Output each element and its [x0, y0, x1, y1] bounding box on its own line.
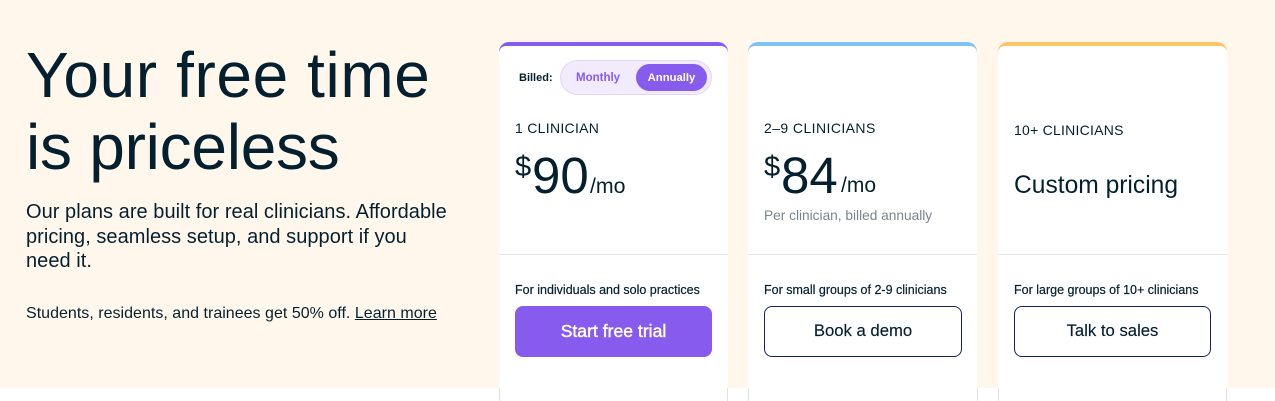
price: $90/mo: /mo	[590, 174, 626, 198]
divider	[499, 254, 728, 255]
intro text: need it.	[26, 250, 92, 272]
price: $84/mo: $	[764, 151, 780, 183]
custom pricing: Custom pricing	[1014, 172, 1178, 199]
divider	[998, 254, 1227, 255]
button: start free trial	[515, 306, 712, 357]
audience text: For small groups of 2-9 clinicians	[764, 283, 947, 297]
button: talk to sales: Talk to sales	[1067, 321, 1158, 340]
price: $90/mo: 90	[532, 147, 589, 204]
intro text: Our plans are built for real clinicians. Affordable	[26, 201, 447, 223]
audience text: For large groups of 10+ clinicians	[1014, 283, 1198, 297]
button: start free trial: Start free trial	[561, 321, 666, 341]
card side line	[499, 388, 500, 401]
card side line	[727, 388, 728, 401]
card side line	[977, 388, 978, 401]
panel: 2-9 clinicians card	[748, 42, 977, 401]
audience text: For individuals and solo practices	[515, 283, 700, 297]
panel: 10+ clinicians card	[998, 42, 1227, 401]
price: $84/mo: 84	[781, 147, 838, 204]
title: is priceless	[26, 111, 340, 183]
tier label: 1 clinician: 1 CLINICIAN	[515, 120, 599, 136]
price: $84/mo: /mo	[841, 174, 876, 197]
title: Your free time	[26, 39, 430, 111]
tier label: 2-9 clinicians: 2–9 CLINICIANS	[764, 120, 876, 136]
button: book a demo: Book a demo	[814, 321, 912, 340]
monthly option: Monthly	[576, 72, 620, 84]
billing toggle	[560, 60, 712, 95]
card side line	[998, 388, 999, 401]
student discount note: Students, residents, and trainees get 50% off. Learn more	[26, 305, 437, 322]
intro text	[26, 201, 447, 272]
price note: Per clinician, billed annually	[764, 208, 932, 223]
card side line	[1226, 388, 1227, 401]
annually option selected: Annually	[648, 72, 695, 84]
intro text: pricing, seamless setup, and support if you	[26, 226, 407, 248]
button: book a demo	[764, 306, 962, 357]
title	[26, 39, 430, 183]
button: talk to sales	[1014, 306, 1211, 357]
divider	[748, 254, 977, 255]
card side line	[748, 388, 749, 401]
price: $90/mo: $	[515, 151, 531, 183]
billed label: Billed:	[519, 72, 553, 84]
tier label: 10+ clinicians: 10+ CLINICIANS	[1014, 122, 1124, 138]
price: $84/mo	[764, 147, 876, 204]
price: $90/mo	[515, 147, 626, 204]
annually option selected	[636, 64, 707, 91]
panel: 1 clinician card	[499, 42, 728, 401]
